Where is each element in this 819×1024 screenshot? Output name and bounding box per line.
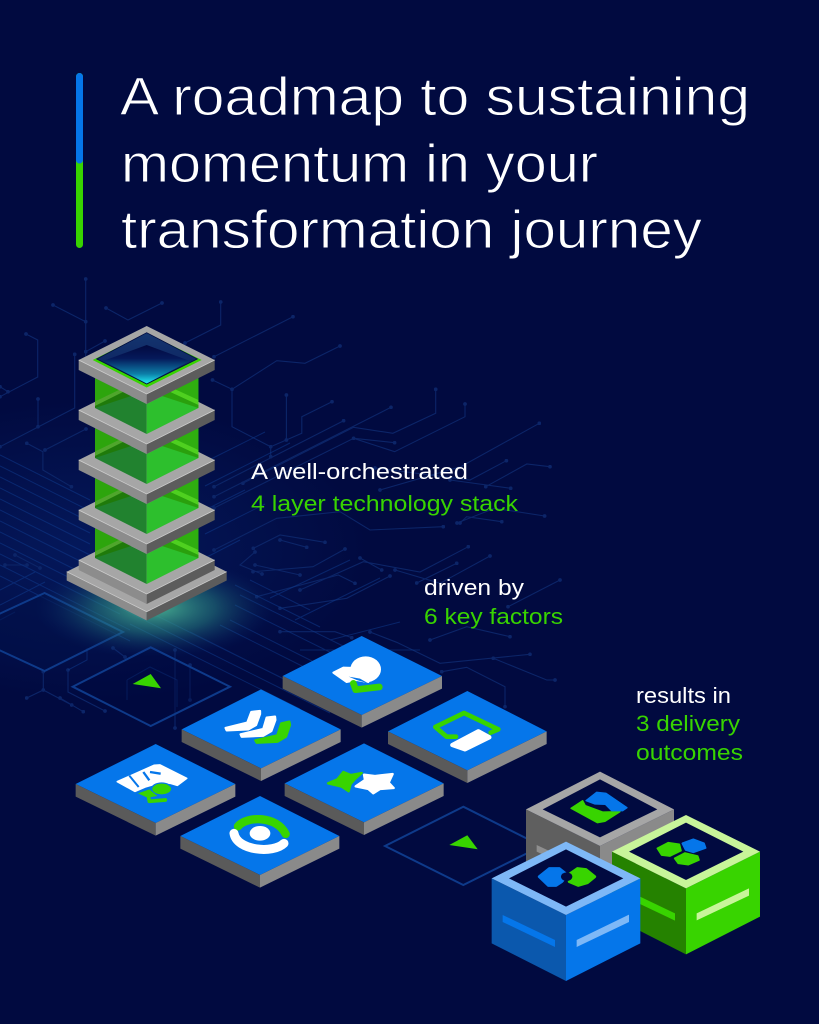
tile: chevrons (182, 689, 341, 781)
key factor tiles (76, 636, 547, 888)
caption: technology stack: A well-orchestrated (251, 459, 468, 484)
empty tile with triangle marker, upper (73, 647, 230, 726)
heading accent bar (76, 73, 83, 248)
tower base (67, 532, 227, 620)
caption: key factors: 6 key factors (424, 604, 563, 629)
cube: gray (526, 772, 674, 910)
tile: screen (388, 691, 547, 783)
background haze (0, 400, 370, 700)
ground glow (35, 558, 275, 658)
empty tile with triangle marker, lower (385, 807, 542, 885)
parallel circuit lines (0, 432, 420, 717)
caption: delivery outcomes (636, 683, 743, 765)
tile: person with check (283, 636, 442, 728)
caption: key factors: driven by (424, 575, 524, 600)
title (120, 67, 750, 260)
title: momentum in your (121, 134, 598, 194)
caption: delivery outcomes: results in (636, 683, 731, 708)
title: A roadmap to sustaining (120, 67, 750, 127)
technology stack tower (67, 326, 227, 620)
cube: blue (492, 842, 640, 981)
caption: technology stack: 4 layer technology stack (251, 491, 519, 516)
caption: key factors (424, 575, 563, 629)
title: transformation journey (121, 200, 702, 260)
tile: stars (285, 743, 444, 835)
large outlined background diamond (0, 593, 123, 671)
tower top screen (93, 333, 202, 388)
delivery outcome cubes (492, 772, 760, 981)
caption: delivery outcomes: 3 delivery (636, 711, 740, 736)
caption: technology stack (251, 459, 519, 516)
tile: ID card with person (76, 744, 235, 836)
tile: cycle (180, 796, 339, 888)
circuit traces background (0, 279, 560, 728)
cube: green (612, 815, 760, 954)
caption: delivery outcomes: outcomes (636, 740, 743, 765)
